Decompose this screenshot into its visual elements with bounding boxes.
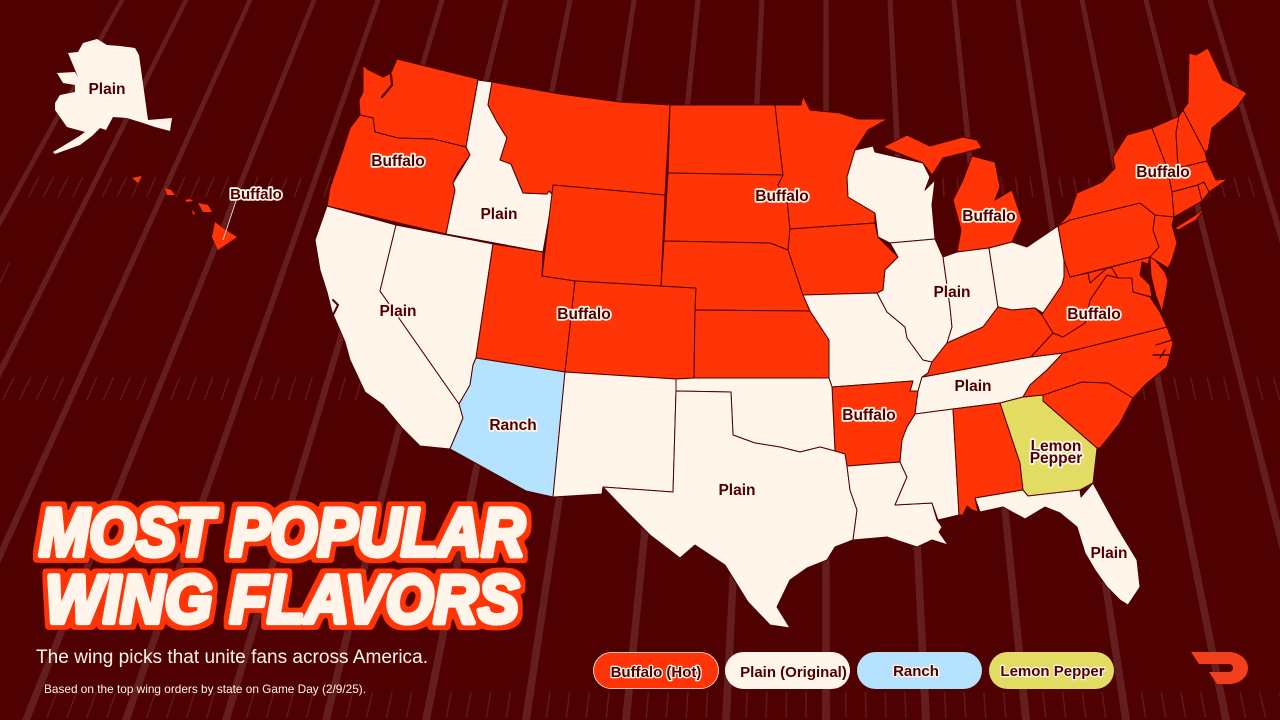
label: Oregon: Buffalo [371, 153, 425, 170]
map: Hawaii [132, 176, 237, 250]
state: Michigan lower [953, 156, 1022, 252]
state: Missouri [803, 293, 932, 391]
state: Idaho [446, 80, 553, 252]
map: contiguous states [315, 48, 1247, 628]
state: Michigan upper [883, 135, 982, 175]
label: Alaska: Plain [88, 81, 126, 98]
title [39, 494, 525, 638]
title: MOST POPULAR [39, 494, 525, 570]
state: Alabama [953, 403, 1023, 515]
label: Illinois and Indiana: Plain [933, 284, 971, 301]
state: Florida [975, 483, 1140, 605]
water inlets: Pamlico, Puget, San Francisco [333, 75, 1172, 358]
legend: Ranch [857, 652, 982, 689]
state: Arizona [450, 358, 565, 497]
legend: Ranch: Ranch [893, 663, 939, 680]
label: Utah and Colorado: Buffalo [557, 306, 611, 323]
logo: DoorDash [1191, 652, 1248, 684]
subtitle: The wing picks that unite fans across America. [36, 647, 428, 668]
legend: Plain [725, 652, 850, 689]
state: Connecticut [1172, 185, 1202, 217]
state labels [88, 81, 1190, 562]
state: North Dakota [668, 105, 783, 175]
state: Nebraska [661, 241, 810, 311]
state: Virginia [1031, 275, 1167, 357]
state: Louisiana [847, 462, 948, 547]
label: Arizona: Ranch [489, 417, 537, 434]
label: Georgia: Lemon [1031, 438, 1081, 455]
label: Virginia: Buffalo [1067, 306, 1121, 323]
label: Dakotas: Buffalo [755, 188, 809, 205]
footnote: Based on the top wing orders by state on Game Day (2/9/25). [44, 683, 366, 696]
label: Hawaii: Buffalo [230, 186, 282, 203]
state: Ohio [989, 226, 1064, 313]
state: Oregon [327, 115, 470, 234]
label: Tennessee: Plain [954, 378, 992, 395]
state: South Carolina [1043, 382, 1133, 448]
state: Arkansas [832, 381, 918, 466]
label: Arkansas: Buffalo [842, 407, 896, 424]
state: Utah [476, 244, 575, 372]
state: South Dakota [664, 173, 790, 250]
state: California [315, 206, 463, 449]
legend [594, 652, 1114, 689]
state: Massachusetts [1168, 161, 1228, 192]
state: Wyoming [542, 185, 665, 286]
label: Texas: Plain [718, 482, 756, 499]
state: Texas [603, 391, 857, 628]
label: Nevada and California: Plain [379, 303, 417, 320]
state: Maryland [1088, 257, 1152, 297]
map: Alaska [53, 39, 172, 154]
title: WING FLAVORS [45, 562, 519, 638]
state: Long Island [1175, 208, 1205, 230]
legend: Buffalo: Buffalo (Hot) [611, 664, 701, 681]
state: Montana [488, 82, 670, 195]
state: Indiana [943, 248, 998, 343]
legend: Plain: Plain (Original) [740, 664, 847, 681]
state: Nevada [380, 225, 493, 404]
state: Vermont [1152, 116, 1179, 172]
state: Pennsylvania [1058, 203, 1159, 277]
state: Oklahoma [676, 378, 835, 452]
label: Idaho: Plain [480, 206, 518, 223]
state: New Hampshire [1176, 110, 1207, 168]
label: Michigan: Buffalo [962, 208, 1016, 225]
label: Georgia line two: Pepper [1030, 450, 1082, 467]
state: Georgia [1000, 395, 1097, 496]
label: Northeast: Buffalo [1136, 164, 1190, 181]
label: Florida: Plain [1090, 545, 1128, 562]
state: New Jersey [1150, 215, 1177, 268]
state: Colorado [565, 281, 696, 379]
state: Delmarva and Delaware [1150, 257, 1168, 312]
state: Minnesota [775, 96, 888, 229]
legend: Lemon Pepper [989, 652, 1114, 689]
state: Kentucky [923, 307, 1053, 377]
state: West Virginia [1042, 260, 1118, 337]
state: Mississippi [895, 409, 959, 520]
state: North Carolina [1023, 327, 1173, 398]
state: New Mexico [553, 372, 676, 497]
leader line [223, 201, 236, 240]
state: Wisconsin [847, 146, 935, 243]
state: Washington [359, 59, 478, 147]
state: New York [1058, 128, 1174, 226]
legend: Lemon Pepper: Lemon Pepper [1000, 663, 1105, 680]
state: Iowa [788, 223, 898, 295]
state: Tennessee [915, 353, 1063, 414]
state: Kansas [694, 310, 829, 378]
legend: Buffalo [594, 652, 718, 688]
state: Illinois [877, 239, 952, 362]
state: Maine [1183, 48, 1247, 152]
state: Rhode Island [1198, 182, 1209, 201]
